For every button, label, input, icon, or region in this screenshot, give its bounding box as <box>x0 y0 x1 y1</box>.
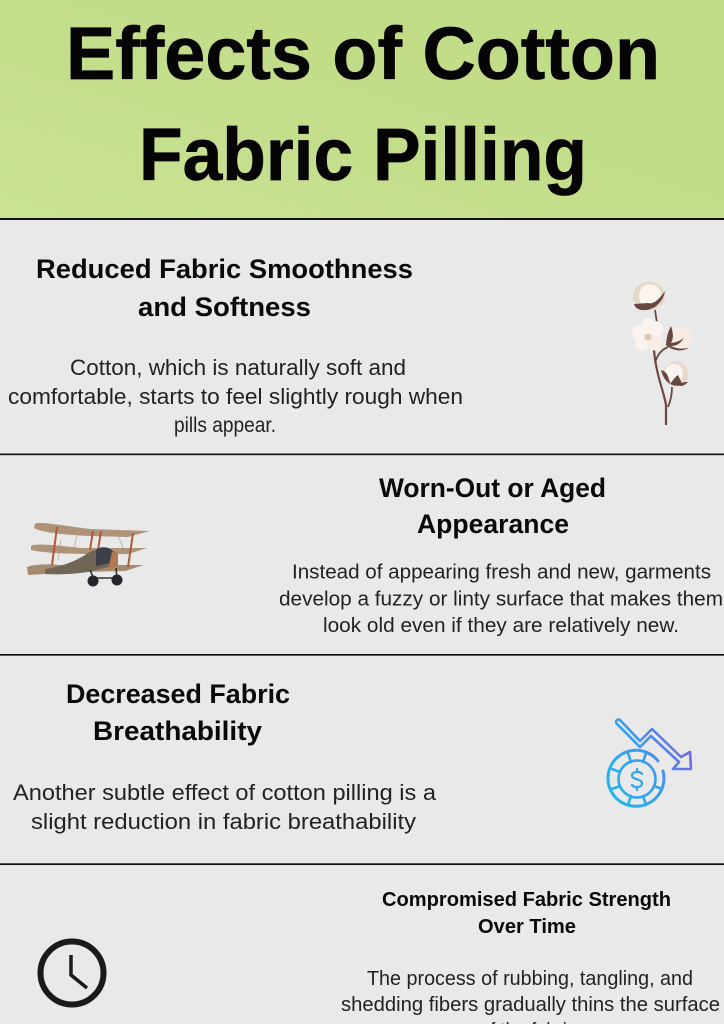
heading: worn-out: Worn-Out or Aged <box>379 473 606 503</box>
boll: lower <box>661 362 688 386</box>
title <box>66 12 660 196</box>
heading: compromised strength <box>382 889 671 938</box>
text: compromised strength: The process of rubbing, tangling, and <box>367 967 693 990</box>
panel: worn-out appearance <box>0 455 724 654</box>
panel: reduced smoothness <box>0 220 724 454</box>
header banner <box>0 0 724 218</box>
text: breathability: slight reduction in fabric breathability <box>31 809 416 834</box>
heading: compromised strength: Over Time <box>478 916 576 938</box>
text: breathability: Another subtle effect of cotton pilling is a <box>13 780 437 805</box>
icon: falling money chart <box>608 720 691 806</box>
heading: reduced smoothness <box>36 254 413 322</box>
text: reduced smoothness: comfortable, starts to feel slightly rough when <box>8 384 463 409</box>
heading: breathability: Breathability <box>93 716 262 746</box>
text: worn-out: develop a fuzzy or linty surface that makes them <box>279 588 723 610</box>
text: worn-out: Instead of appearing fresh and new, garments <box>292 560 711 584</box>
title: Fabric Pilling <box>139 113 587 196</box>
text: compromised strength: shedding fibers gradually thins the surface <box>341 993 720 1016</box>
panel: decreased breathability <box>0 656 724 863</box>
text: worn-out <box>279 560 723 637</box>
icon: cotton plant <box>632 282 692 425</box>
heading: worn-out <box>379 473 606 539</box>
heading: compromised strength: Compromised Fabric Strength <box>382 889 671 911</box>
text: reduced smoothness <box>8 355 463 437</box>
panel: compromised strength <box>0 865 724 1024</box>
heading: reduced smoothness: Reduced Fabric Smoothness <box>36 254 413 284</box>
boll: top <box>633 282 665 310</box>
icon: clock <box>40 942 104 1004</box>
icon: vintage biplane <box>27 523 150 586</box>
boll: open flower <box>632 318 663 351</box>
text: reduced smoothness: pills appear. <box>174 414 276 437</box>
boll: right <box>666 326 692 350</box>
heading: worn-out: Appearance <box>417 509 569 539</box>
text: reduced smoothness: Cotton, which is naturally soft and <box>70 355 406 380</box>
heading: reduced smoothness: and Softness <box>138 292 311 322</box>
text: worn-out: look old even if they are relatively new. <box>323 614 679 637</box>
text: compromised strength <box>341 967 720 1024</box>
heading: breathability: Decreased Fabric <box>66 679 290 709</box>
text: breathability <box>13 780 437 834</box>
heading: breathability <box>66 679 290 746</box>
title: Effects of Cotton <box>66 12 660 95</box>
